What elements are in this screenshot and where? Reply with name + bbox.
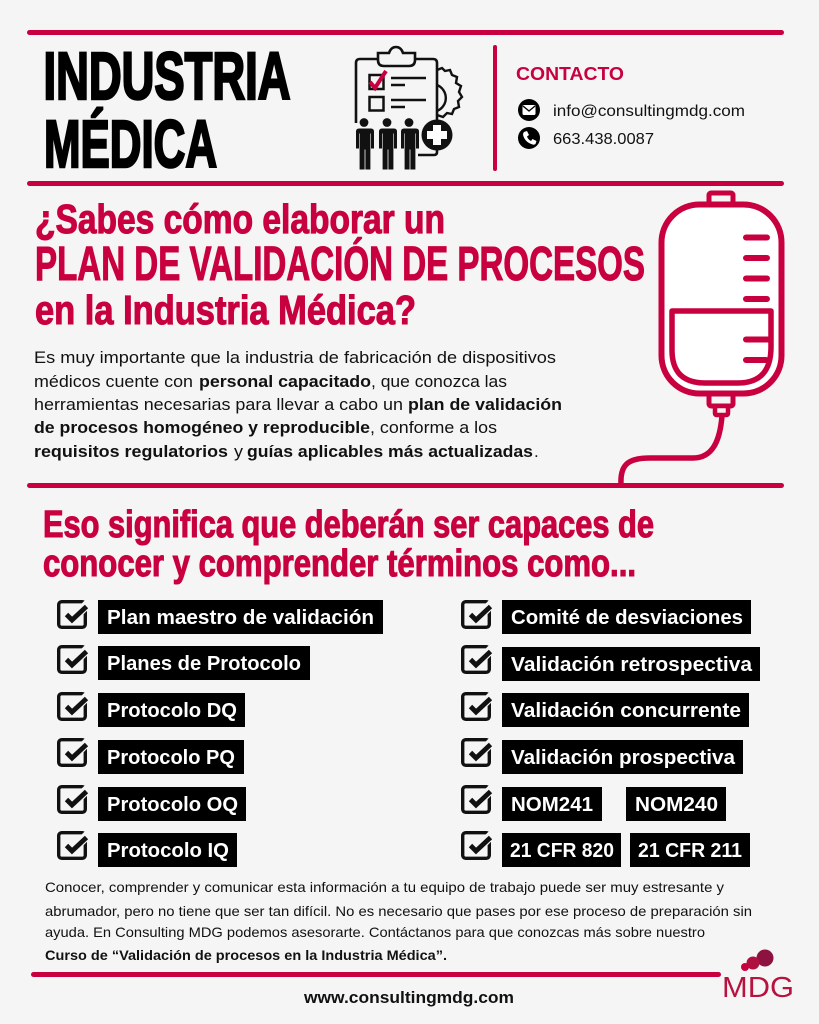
checklist: left column [59,600,383,867]
item: NOM241 and NOM240 [463,787,726,821]
icon: IV bag [621,193,782,484]
item: 21 CFR 820 and 21 CFR 211: 21 CFR 820 [510,840,614,862]
item: Protocolo DQ: Protocolo DQ [107,700,237,722]
item: Protocolo PQ: Protocolo PQ [107,747,235,769]
item: 21 CFR 820 and 21 CFR 211 [463,833,750,867]
text block: intro paragraph: médicos cuente con [34,372,193,391]
text block: intro paragraph: Es muy importante que la industria de fabricación de dispositivos [34,348,556,367]
item: Protocolo OQ: Protocolo OQ [107,794,238,816]
item: Protocolo DQ [59,693,245,727]
contact block [516,64,745,149]
heading: terms: conocer y comprender términos como... [43,543,636,585]
item: Validación retrospectiva: Validación retrospectiva [511,654,753,676]
contact block: info@consultingmdg.com [553,103,745,120]
heading: terms [43,504,654,585]
heading: question [35,196,645,333]
text block: intro paragraph: requisitos regulatorios [34,442,228,461]
item: Plan maestro de validación [59,600,383,634]
item: Protocolo PQ [59,740,244,774]
text block: intro paragraph: . [534,442,539,461]
item: Validación retrospectiva [463,647,760,681]
text block: intro paragraph [34,348,562,461]
text block: closing paragraph: Conocer, comprender y comunicar esta información a tu equipo de trabajo puede ser muy estresante y [45,880,724,895]
icon: email [518,99,540,121]
item: Comité de desviaciones [463,600,751,634]
title [44,39,290,182]
item: Planes de Protocolo: Planes de Protocolo [107,653,301,675]
item: NOM241 and NOM240: NOM241 [511,794,593,816]
item: Protocolo IQ [59,833,237,867]
heading: question: ¿Sabes cómo elaborar un [35,196,445,242]
text block: intro paragraph: guías aplicables más actualizadas [247,442,533,461]
checklist: right column [463,600,760,867]
item: Validación prospectiva: Validación prospectiva [511,747,736,769]
item: Comité de desviaciones: Comité de desviaciones [511,607,743,629]
text block: intro paragraph: herramientas necesarias para llevar a cabo un [34,395,403,414]
text block: intro paragraph: , que conozca las [371,372,507,391]
logo: MDG: MDG [722,972,794,1004]
text block: closing paragraph [45,880,752,963]
website: www.consultingmdg.com [303,989,514,1007]
heading: terms: Eso significa que deberán ser capaces de [43,504,654,546]
item: Validación prospectiva [463,740,743,774]
heading: question: en la Industria Médica? [35,287,416,333]
icon: clipboard with team and gear [356,47,462,170]
contact block: 663.438.0087 [553,131,654,148]
text block: intro paragraph: personal capacitado [199,372,371,391]
text block: intro paragraph: de procesos homogéneo y reproducible [34,418,370,437]
title: INDUSTRIA [44,39,290,114]
contact block: CONTACTO [516,64,624,84]
icon: gear [437,68,462,117]
item: NOM241 and NOM240: NOM240 [635,794,718,816]
text block: closing paragraph: abrumador, pero no tiene que ser tan difícil. No es necesario que pases por ese proceso de preparación sin [45,904,752,919]
item: 21 CFR 820 and 21 CFR 211: 21 CFR 211 [638,840,742,862]
item: Validación concurrente: Validación concurrente [511,700,741,722]
item: Validación concurrente [463,693,749,727]
logo: MDG [722,950,794,1004]
text block: closing paragraph: Curso de “Validación de procesos en la Industria Médica”. [45,948,447,963]
text block: intro paragraph: , conforme a los [370,418,497,437]
text block: intro paragraph: plan de validación [408,395,562,414]
item: Protocolo IQ: Protocolo IQ [107,840,229,862]
text block: intro paragraph: y [234,442,244,461]
item: Planes de Protocolo [59,646,310,680]
icon: phone [518,127,540,149]
text block: closing paragraph: ayuda. En Consulting MDG podemos asesorarte. Contáctanos para que conozcas más sobre nuestro [45,925,705,940]
item: Plan maestro de validación: Plan maestro de validación [107,607,374,629]
item: Protocolo OQ [59,787,246,821]
title: MÉDICA [44,107,217,182]
